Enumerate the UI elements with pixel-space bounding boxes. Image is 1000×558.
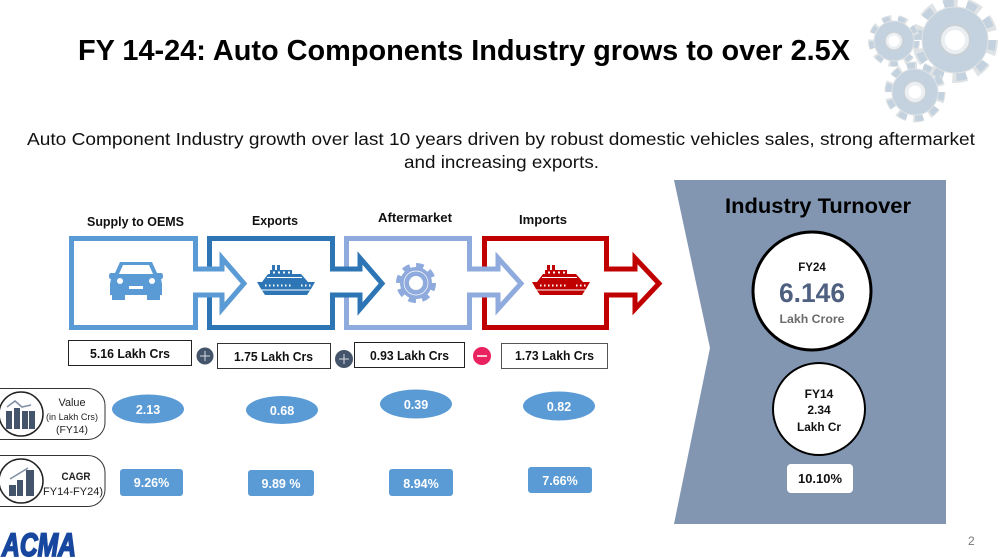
FY14 circle: [773, 363, 865, 455]
column headings: Exports: [252, 214, 298, 228]
icon: minus: [473, 347, 491, 365]
CAGR badges: [120, 467, 592, 496]
row label: CAGR: [0, 456, 105, 506]
value pills: [112, 390, 595, 424]
FY24 circle: 6.146: [779, 278, 845, 308]
icon: bars with trend line: [0, 392, 43, 436]
icon: ship (imports): [532, 265, 590, 295]
subtitle: Auto Component Industry growth over last 10 years driven by robust domestic vehicles sales, strong aftermarket: [27, 129, 975, 149]
FY14 circle: FY14: [805, 387, 834, 401]
value pills: 2.13: [136, 403, 160, 417]
column headings: Imports: [519, 213, 567, 227]
icon: plus: [196, 348, 214, 364]
CAGR badges: 7.66%: [542, 474, 578, 488]
value box: supply to OEMS: 5.16 Lakh Crs: [90, 347, 170, 361]
value pills: 0.68: [270, 404, 294, 418]
CAGR badge: 10.10%: [798, 472, 842, 486]
arrow box: exports: [210, 238, 382, 328]
value box: imports: 1.73 Lakh Crs: [515, 349, 594, 363]
CAGR badges: 9.26%: [134, 476, 169, 490]
CAGR badges: 9.89 %: [262, 477, 300, 491]
FY14 circle: Lakh Cr: [797, 420, 841, 434]
column headings: [87, 211, 567, 229]
arrow box: imports: [484, 238, 659, 328]
arrow box: supply to OEMS: [72, 238, 244, 328]
FY24 circle: FY24: [798, 262, 826, 274]
row label: value FY14: [0, 388, 105, 440]
row label: CAGR: FY14-FY24): [43, 486, 103, 498]
subtitle: [27, 129, 975, 172]
page number: 2: [968, 534, 975, 548]
icon: ship (exports): [257, 265, 315, 295]
panel heading: Industry Turnover: [725, 195, 911, 218]
icon: gear: [398, 266, 434, 300]
icon: car: [109, 262, 163, 300]
column headings: Aftermarket: [378, 211, 453, 225]
arrow box: aftermarket: [346, 238, 521, 328]
icon: rising bars: [0, 459, 43, 503]
value pills: 0.39: [404, 398, 428, 412]
CAGR badge: [787, 464, 853, 493]
FY24 circle: [753, 232, 871, 350]
icon: plus: [335, 350, 353, 368]
value box: supply to OEMS: [68, 340, 192, 366]
title: FY 14-24: Auto Components Industry grows to over 2.5X: [78, 35, 851, 67]
subtitle: and increasing exports.: [404, 152, 599, 172]
row label: value FY14: (FY14): [56, 424, 88, 436]
row label: value FY14: Value: [58, 397, 86, 409]
value box: exports: 1.75 Lakh Crs: [234, 350, 313, 364]
FY24 circle: Lakh Crore: [780, 312, 845, 326]
value box: aftermarket: 0.93 Lakh Crs: [370, 349, 449, 363]
row label: CAGR: CAGR: [62, 471, 91, 483]
panel: industry turnover: [674, 180, 946, 524]
CAGR badges: 8.94%: [403, 477, 439, 491]
value box: aftermarket: [354, 342, 464, 368]
value box: imports: [502, 344, 608, 368]
icon: gears: [872, 4, 992, 118]
row label: value FY14: (in Lakh Crs): [46, 412, 98, 422]
value pills: 0.82: [547, 400, 571, 414]
value box: exports: [218, 344, 330, 368]
column headings: Supply to OEMS: [87, 215, 184, 229]
FY14 circle: 2.34: [807, 403, 831, 417]
